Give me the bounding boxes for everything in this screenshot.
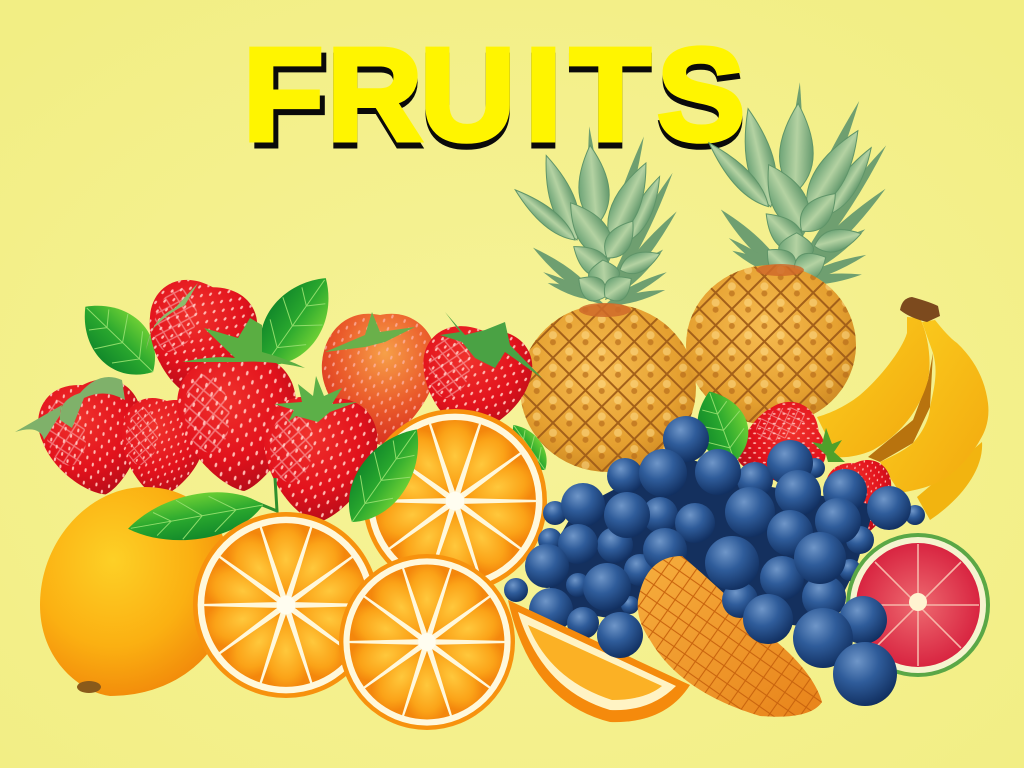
- leaf: upper left: [66, 287, 172, 392]
- grapefruit: [846, 533, 990, 677]
- calyx: right: [440, 312, 542, 378]
- calyx: front: [274, 376, 357, 422]
- blueberries: [504, 416, 925, 639]
- lemon: [40, 487, 232, 696]
- pineapple body: right: [686, 264, 856, 425]
- pineapple: left: [510, 126, 696, 472]
- strawberry: top: [133, 271, 266, 406]
- strawberry: right: [414, 321, 537, 442]
- blueberries: front: [597, 532, 897, 706]
- calyx: middle: [182, 318, 305, 368]
- pineapple: right: [686, 71, 902, 425]
- pineapple crown: left: [510, 126, 681, 309]
- leaf: under strawberries: [124, 483, 267, 551]
- calyx: far left: [15, 377, 125, 440]
- banana: lower: [917, 442, 982, 520]
- leaf: beside orange: [332, 415, 437, 536]
- strawberries: [15, 263, 542, 526]
- strawberry: far left: [31, 372, 156, 505]
- banana: back: [817, 317, 930, 457]
- small strawberry right: [822, 456, 899, 539]
- leaf: behind blueberries: [686, 383, 758, 470]
- mango: [638, 556, 822, 717]
- small calyx: [812, 428, 845, 462]
- strawberry: middle: [173, 353, 303, 496]
- orange wedge: [508, 600, 690, 722]
- strawberry: orange tinted: [322, 312, 437, 445]
- pineapple body: left: [520, 303, 696, 472]
- banana shadow: [868, 353, 933, 462]
- title: FRUITS: [248, 27, 745, 174]
- leaf: upper centre: [243, 263, 348, 381]
- small strawberry behind blueberries: [725, 394, 834, 498]
- orange slice: upper: [363, 409, 547, 593]
- blueberry shadow mass: [540, 455, 875, 630]
- leaf stem: [250, 478, 277, 511]
- banana: front: [880, 320, 988, 493]
- bananas: [817, 297, 988, 520]
- strawberry: back left: [116, 395, 209, 501]
- orange slice: centre: [339, 554, 515, 730]
- banana stem: [900, 297, 940, 322]
- pineapple crown: right: [687, 71, 902, 298]
- strawberry: front: [260, 395, 380, 526]
- calyx: top: [146, 283, 198, 350]
- orange slice: left: [193, 512, 379, 698]
- title: FRUITS: [243, 21, 745, 168]
- leaf: behind orange: [503, 418, 555, 477]
